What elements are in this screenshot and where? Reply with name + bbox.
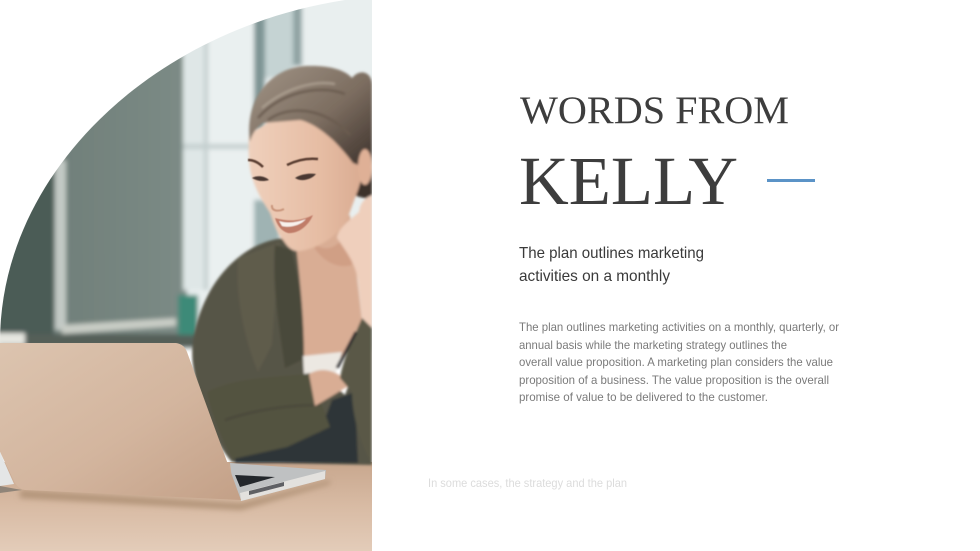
hair: [249, 66, 372, 170]
body paragraph: annual basis while the marketing strategy outlines the: [519, 338, 787, 352]
subheading: activities on a monthly: [519, 268, 670, 285]
ear: [358, 149, 372, 185]
table: [0, 462, 372, 551]
photo: woman smiling at laptop in arched frame: [0, 0, 382, 551]
subheading: [519, 245, 704, 285]
body paragraph: overall value proposition. A marketing plan considers the value: [519, 355, 833, 369]
body paragraph: [519, 320, 839, 404]
face: [249, 108, 366, 251]
hand: [337, 195, 372, 328]
laptop base: [230, 463, 326, 501]
chest and neck: [296, 215, 362, 358]
woman: [192, 66, 372, 465]
dark hair behind neck: [354, 170, 372, 200]
laptop lid: [0, 343, 241, 500]
laptop: [0, 343, 330, 510]
subheading: The plan outlines marketing: [519, 245, 704, 262]
body paragraph: The plan outlines marketing activities on a monthly, quarterly, or: [519, 320, 839, 334]
rolled sleeve: [238, 372, 330, 459]
title: kelly: KELLY: [519, 143, 738, 219]
wrist: [309, 370, 350, 406]
facial features: [248, 159, 318, 233]
office background: [0, 0, 382, 350]
body paragraph: proposition of a business. The value proposition is the overall: [519, 373, 829, 387]
title: words from: WORDS FROM: [520, 89, 789, 132]
faint caption: In some cases, the strategy and the plan: [428, 476, 627, 490]
body paragraph: promise of value to be delivered to the customer.: [519, 390, 768, 404]
shadow under laptop: [20, 480, 330, 510]
right sleeve: [338, 317, 372, 422]
ports: [249, 482, 284, 495]
keyboard: [235, 475, 275, 487]
dark undershirt: [235, 392, 358, 463]
shirt: [192, 238, 372, 465]
papers by laptop: [0, 452, 14, 486]
accent line: [767, 179, 815, 182]
